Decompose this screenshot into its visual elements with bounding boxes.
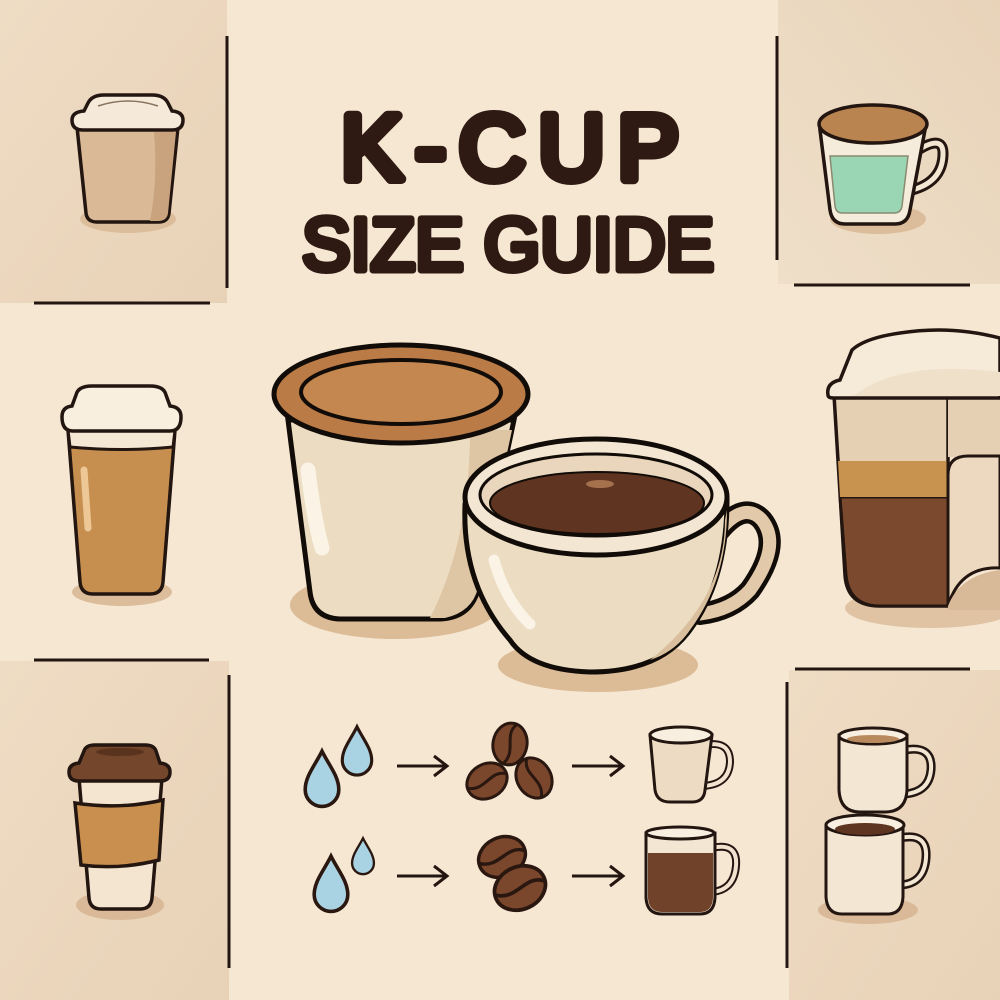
icon: main k-cup pod	[274, 345, 528, 639]
arrow	[397, 756, 447, 776]
icon: water drops	[305, 727, 372, 806]
icon: cream mug	[650, 727, 730, 802]
panel: top left	[0, 0, 227, 303]
panel: bottom left	[0, 660, 229, 1000]
title	[302, 97, 714, 286]
process row 2	[314, 827, 736, 918]
icon: mug with green liquid	[819, 105, 943, 234]
panel: bottom right	[787, 669, 1000, 1000]
icon: coffee maker	[828, 330, 1000, 628]
icon: water drops	[314, 838, 374, 911]
arrow	[572, 866, 623, 886]
icon: dark coffee mug	[646, 827, 736, 914]
arrow	[572, 756, 623, 776]
panel: top right	[777, 0, 1000, 285]
icon: coffee beans	[460, 720, 559, 806]
icon: brown lid coffee cup	[69, 745, 170, 920]
heading: K-CUP: K-CUP	[341, 97, 679, 199]
icon: stacked mugs	[818, 728, 931, 924]
icon: small paper cup	[72, 95, 183, 233]
arrow	[397, 866, 447, 886]
process row 1	[305, 720, 730, 806]
heading: SIZE GUIDE: SIZE GUIDE	[302, 203, 714, 286]
icon: main coffee cup	[465, 439, 770, 692]
icon: tall coffee cup	[62, 386, 181, 606]
icon: coffee beans	[472, 829, 553, 918]
